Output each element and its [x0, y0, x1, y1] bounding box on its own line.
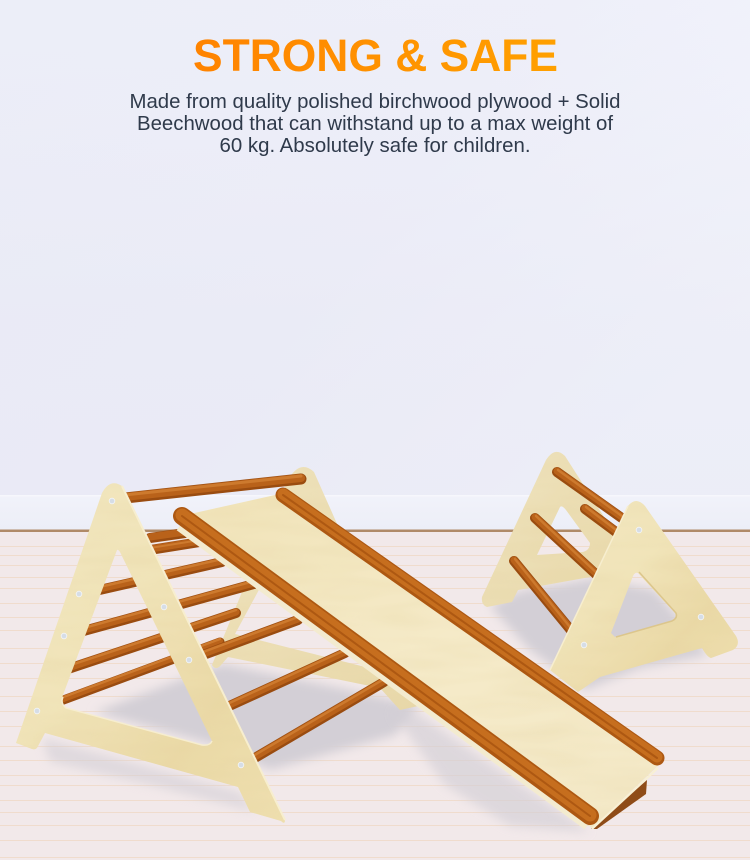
large triangle screws [34, 498, 244, 768]
description text: 60 kg. Absolutely safe for children. [220, 135, 530, 157]
large triangle rungs [58, 476, 384, 762]
slide ramp [179, 494, 662, 829]
wooden floor [0, 530, 750, 860]
description text: Made from quality polished birchwood plywood + Solid [130, 91, 620, 113]
slide side edge [179, 527, 587, 826]
small climbing triangle [482, 452, 738, 692]
description text: Beechwood that can withstand up to a max weight of [137, 113, 613, 135]
description text [130, 91, 620, 157]
slide underside strip [591, 780, 647, 829]
large triangle back frame [212, 467, 418, 710]
title: STRONG & SAFE [193, 30, 558, 81]
right rail [283, 494, 657, 758]
large climbing triangle [16, 467, 418, 823]
slide surface [180, 495, 662, 828]
large triangle front frame [16, 483, 285, 823]
small triangle front frame [550, 501, 738, 692]
floor shadows [42, 578, 708, 832]
small triangle screws [581, 527, 704, 648]
wall background [0, 0, 750, 531]
small triangle rungs [514, 470, 655, 634]
left rail [182, 515, 590, 816]
small triangle back frame [482, 452, 622, 607]
